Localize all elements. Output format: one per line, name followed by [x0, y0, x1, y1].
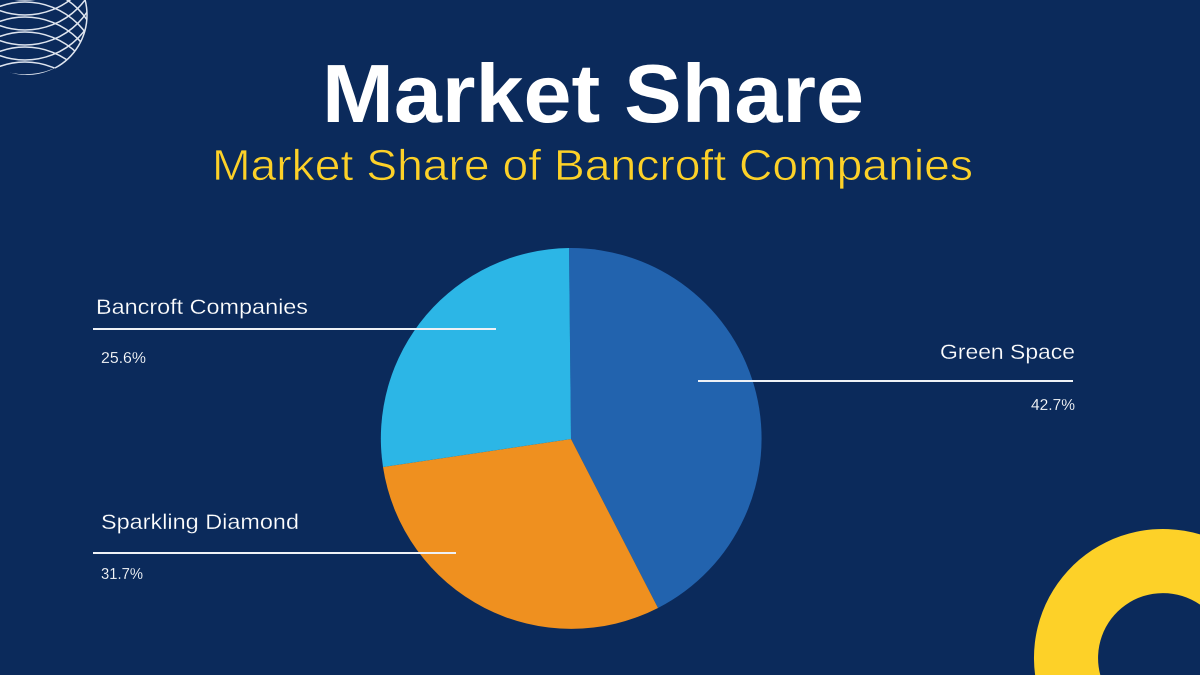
title: Market Share — [322, 47, 864, 140]
pie chart — [381, 248, 762, 629]
callout: Bancroft Companies: Bancroft Companies — [96, 296, 308, 319]
callout: Green Space: Green Space — [940, 341, 1075, 364]
callout: Green Space: 42.7% — [1031, 397, 1075, 414]
slice: Sparkling Diamond — [383, 439, 658, 629]
icon: yellow ring — [1034, 529, 1200, 675]
callout: Bancroft Companies: 25.6% — [101, 350, 146, 367]
callout: Green Space — [698, 341, 1075, 414]
callout: Sparkling Diamond: 31.7% — [101, 566, 143, 583]
callout: Bancroft Companies — [93, 296, 496, 367]
slice: Bancroft Companies — [381, 248, 571, 467]
icon: wireframe sphere — [0, 0, 88, 75]
subtitle: Market Share of Bancroft Companies — [212, 141, 973, 190]
slice: Green Space — [569, 248, 762, 608]
callout: Sparkling Diamond: Sparkling Diamond — [101, 511, 299, 534]
callout: Sparkling Diamond — [93, 511, 456, 583]
